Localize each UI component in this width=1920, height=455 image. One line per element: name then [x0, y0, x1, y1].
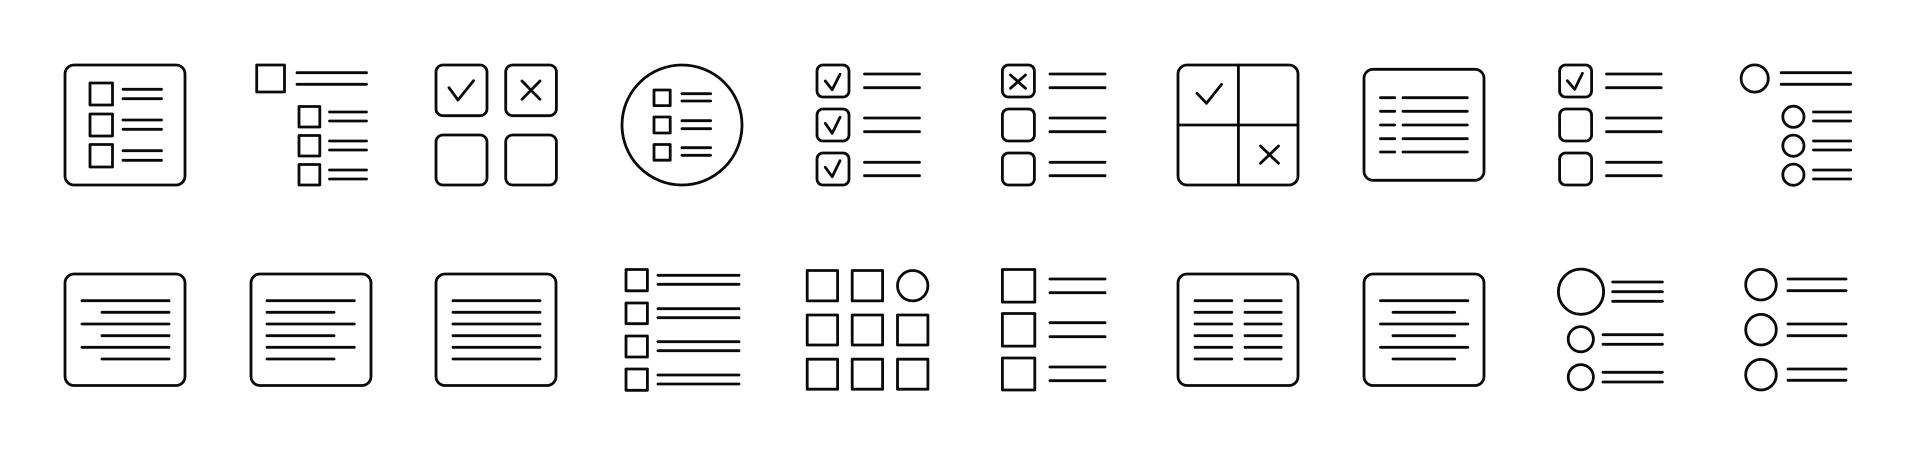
icon: circle with checkbox list — [622, 65, 742, 185]
icon: four square list rows — [626, 270, 739, 390]
icon: nested circle list — [1741, 65, 1851, 185]
icon: three circle list rows — [1746, 269, 1846, 390]
icon: document with justified text — [436, 274, 556, 386]
icon: document with centered text — [1364, 274, 1484, 386]
icon: rows with one crossed box — [1002, 65, 1105, 185]
icon: document with left-aligned text — [251, 274, 371, 386]
icon: three checked rows — [817, 65, 920, 185]
icon: quadrant grid with check and cross — [1178, 65, 1298, 185]
icon: three by three grid with one circle — [807, 270, 928, 389]
icon: four tiles with check and cross — [436, 65, 556, 185]
icon: card with three checkbox rows — [65, 65, 185, 185]
icon: nested square list — [257, 65, 366, 185]
icon: three large square list rows — [1002, 270, 1105, 390]
icon: rows with one checked box — [1560, 65, 1661, 185]
icon: document with two text columns — [1178, 274, 1298, 386]
icon: document with right-aligned text — [65, 274, 185, 386]
icon: document with bullet list — [1364, 69, 1484, 180]
icon: large and small circle list — [1558, 269, 1662, 390]
